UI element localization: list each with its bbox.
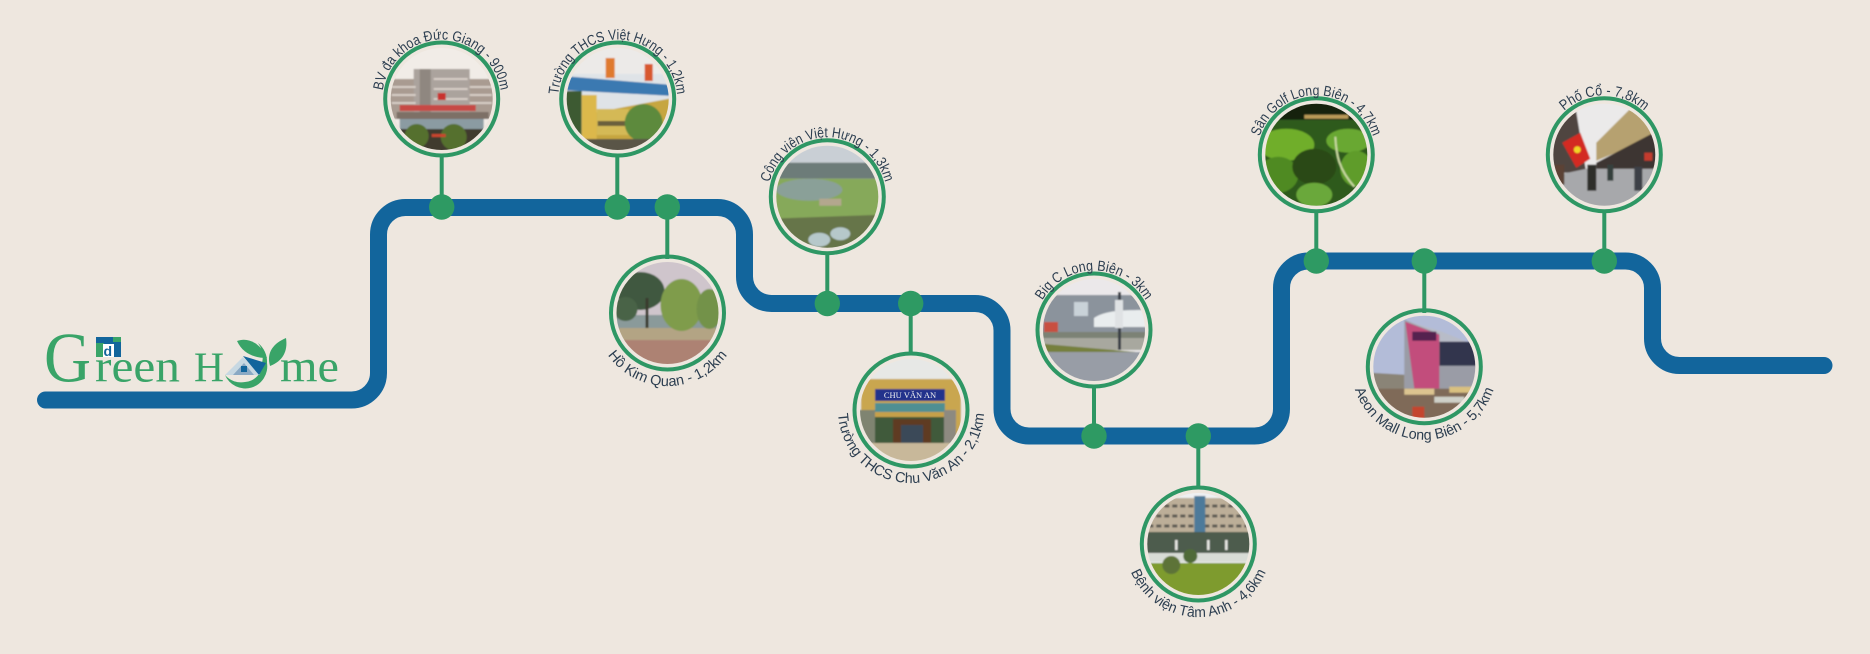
ring [611, 256, 724, 370]
label: Công viên Việt Hưng - 1,3km [761, 127, 892, 182]
node [1186, 423, 1211, 449]
label: Phố Cổ - 7,8km [1558, 84, 1648, 110]
stop: Hồ Kim Quan [608, 194, 727, 388]
label: BV đa khoa Đức Giang - 900m [373, 28, 508, 90]
stop: Trường THCS Chu Văn An [838, 290, 984, 484]
marker with photo [1546, 84, 1663, 214]
node [655, 194, 680, 220]
ring [1368, 310, 1481, 423]
label: Trường THCS Việt Hưng - 1,2km [548, 29, 684, 94]
marker with photo [608, 254, 727, 388]
photo: old quarter street [1553, 104, 1656, 206]
node [1592, 248, 1617, 274]
route line [46, 208, 1824, 436]
connector [909, 305, 913, 355]
connector [1602, 211, 1606, 261]
connector [825, 252, 829, 302]
ring [561, 42, 674, 156]
photo: shopping centre [1043, 279, 1145, 381]
photo: school gate [566, 48, 669, 150]
stop: BV đa khoa Đức Giang [373, 28, 508, 220]
photo sign text: CHU VĂN AN [884, 390, 936, 400]
logo icon: house and leaves [225, 338, 286, 388]
label: Bệnh viện Tâm Anh - 4,6km [1131, 568, 1266, 618]
stop: Trường THCS Việt Hưng [548, 29, 684, 220]
connector [440, 155, 444, 205]
ring [771, 140, 884, 253]
connector [1092, 386, 1096, 436]
photo: hospital and lawn [1147, 493, 1250, 595]
marker with photo [373, 28, 508, 158]
stop: Sân Golf Long Biên [1251, 86, 1380, 274]
stop: Big C Long Biên [1034, 260, 1152, 449]
logo wordmark [44, 320, 339, 398]
connector [1422, 263, 1426, 313]
stop: Công viên Việt Hưng [761, 127, 892, 316]
label: Aeon Mall Long Biên - 5,7km [1354, 388, 1494, 443]
photo: Chu Văn An gate [860, 378, 962, 461]
node [1081, 423, 1107, 449]
connector [665, 209, 669, 259]
photo: golf course [1265, 104, 1368, 206]
marker with photo [761, 127, 892, 256]
photo: lake and trees [616, 262, 718, 364]
logo badge: d [104, 343, 112, 359]
logo wordmark: H [194, 346, 224, 392]
stop: Phố Cổ [1546, 84, 1663, 274]
node [605, 194, 630, 220]
logo badge [96, 337, 121, 359]
ring [1548, 98, 1661, 211]
marker with photo [1034, 260, 1152, 388]
connector [1314, 211, 1318, 261]
marker with photo [1131, 486, 1266, 618]
logo: Green Home [44, 320, 339, 398]
marker with photo [1251, 86, 1380, 214]
ring [854, 354, 968, 466]
ring [1038, 274, 1150, 386]
logo wordmark: me [280, 340, 339, 392]
photo: park aerial [776, 146, 878, 248]
connector [1196, 438, 1200, 488]
ring [385, 42, 498, 156]
node [898, 291, 923, 316]
logo wordmark: reen [95, 340, 180, 392]
node [815, 291, 840, 316]
stop: Bệnh viện Tâm Anh [1131, 423, 1266, 618]
logo wordmark: G [44, 320, 91, 398]
node [1412, 248, 1437, 274]
label: Trường THCS Chu Văn An - 2,1km [838, 412, 984, 484]
marker with photo [548, 29, 684, 158]
connector [615, 155, 619, 205]
ring [1142, 488, 1255, 600]
label: Hồ Kim Quan - 1,2km [608, 350, 727, 388]
marker with photo [1354, 308, 1494, 443]
marker with photo [838, 352, 984, 484]
label: Big C Long Biên - 3km [1034, 260, 1151, 300]
stop: Aeon Mall Long Biên [1354, 248, 1494, 443]
label: Sân Golf Long Biên - 4,7km [1251, 86, 1380, 136]
photo: Aeon Mall [1373, 316, 1476, 418]
node [429, 194, 454, 220]
node [1304, 248, 1329, 274]
ring [1260, 98, 1373, 211]
photo: hospital building [390, 68, 493, 150]
